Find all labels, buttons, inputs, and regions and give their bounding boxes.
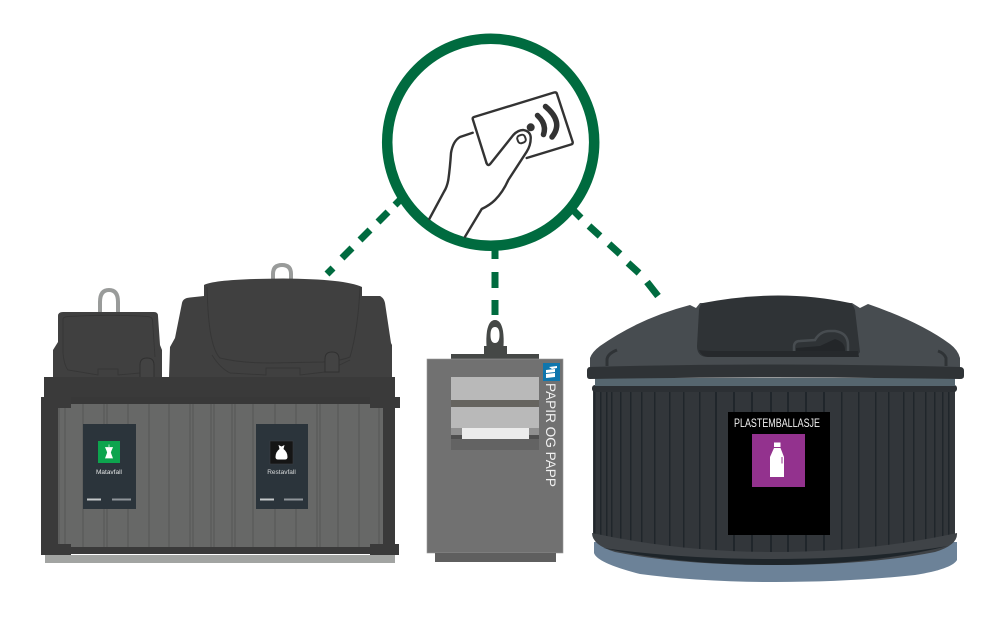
icon: hand holding contactless card [429,92,573,237]
large lid handle [273,265,291,281]
corrugated body [58,400,383,548]
ribbed body [593,390,955,560]
lid hatch [697,296,860,357]
sign: plastic packaging [728,412,830,535]
small lid [53,312,162,378]
large lid [169,278,392,378]
dashed connector: circle to left bin [327,198,402,274]
frame [41,397,400,555]
blue bottom plate [594,542,957,582]
sign: plastic packaging: PLASTEMBALLASJE [734,418,820,430]
dashed connector: circle to right bin [572,209,658,296]
left bin: two-compartment container [41,265,400,563]
paper slot [451,377,539,450]
top bar [451,354,539,359]
bottom ring [592,533,957,565]
card reader icon circle [387,39,594,246]
label: Restavfall: Restavfall [267,469,296,476]
body [427,359,563,553]
handle [484,320,507,354]
base [435,553,556,562]
right bin: plastic packaging [587,296,964,582]
label: Matavfall [83,424,136,509]
icon: blue cardboard boxes [543,363,560,381]
label: Restavfall [256,424,308,509]
vertical text: PAPIR OG PAPP: PAPIR OG PAPP [543,383,559,487]
label: Matavfall: Matavfall [96,469,123,476]
base top [44,377,395,398]
icon: rubbish bag [276,445,288,460]
small lid handle [100,290,118,314]
dome lid [590,303,960,368]
icon: plastic bottle [770,442,784,477]
middle bin: paper and cardboard [427,320,563,562]
ground plate [45,555,395,563]
icon: apple core [106,444,112,458]
rim bands [587,364,964,392]
dashed connector: circle to middle bin [492,250,498,315]
